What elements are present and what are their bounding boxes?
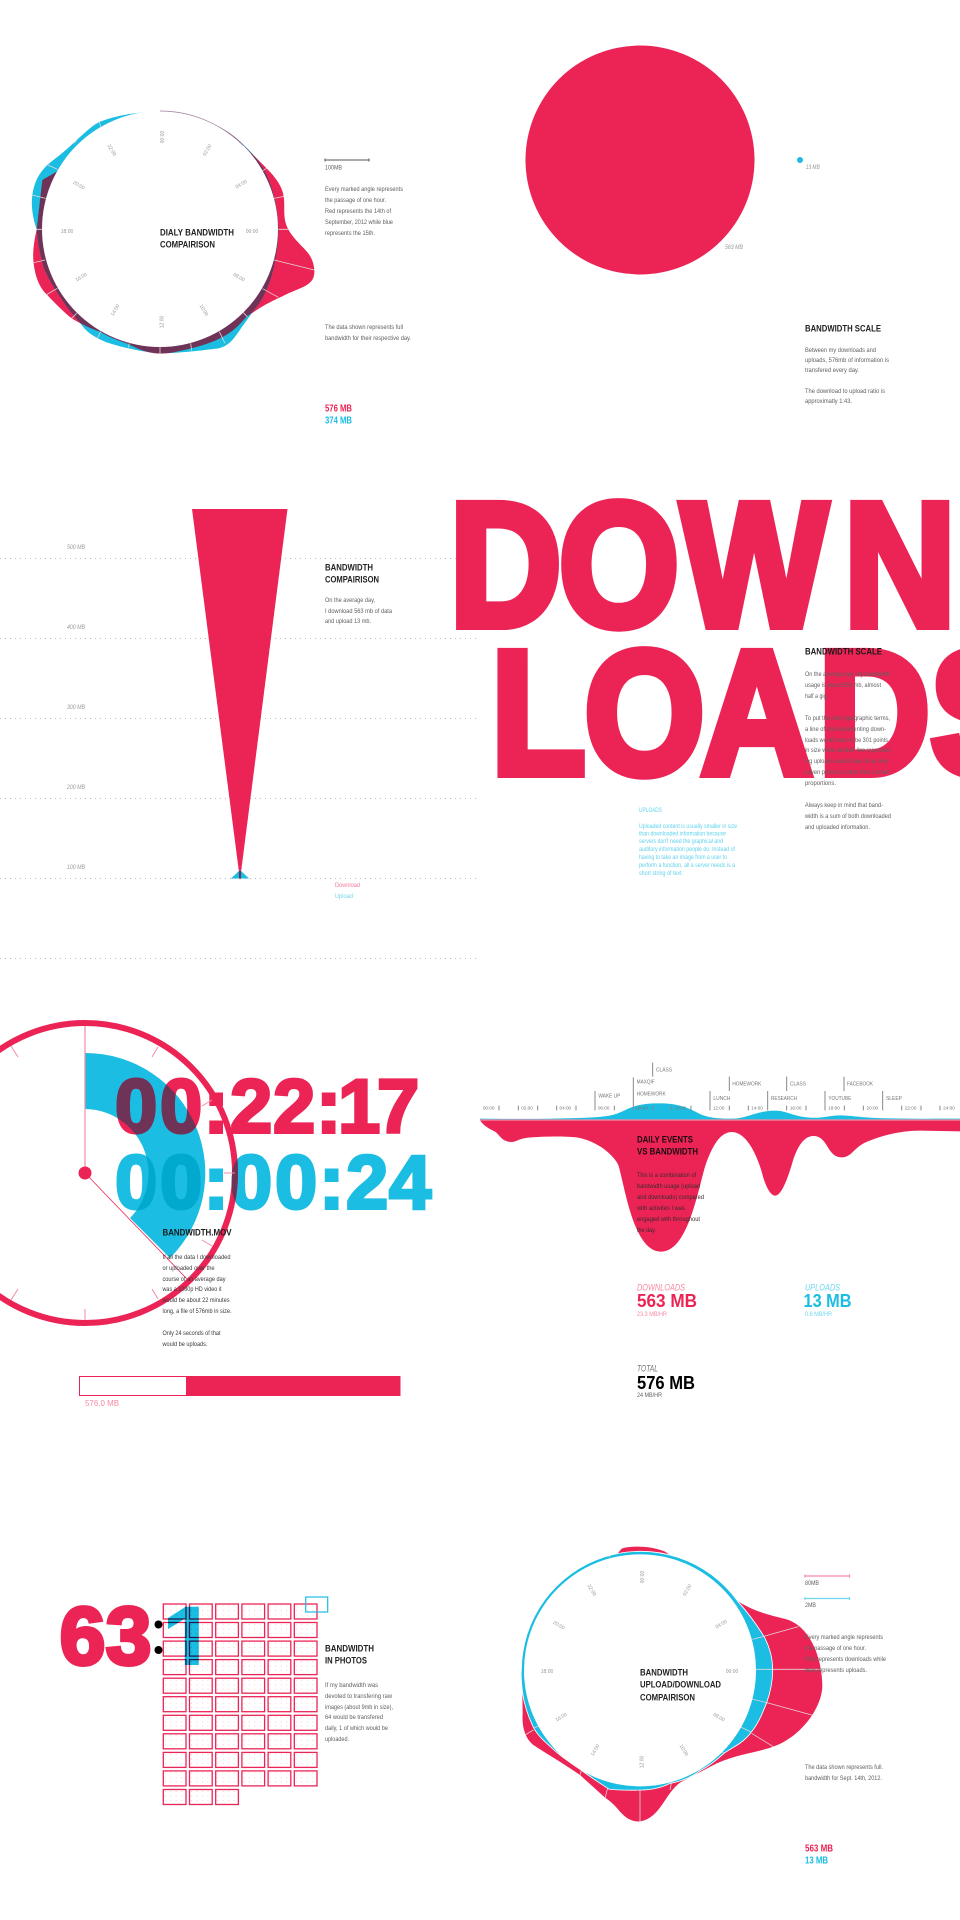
- events description: bandwidth usage (upload: [637, 1184, 700, 1190]
- red blob: 14th of September: [33, 111, 314, 354]
- panel: bandwidth comparison triangles: [0, 509, 480, 958]
- download area: [480, 1120, 960, 1252]
- heading: daily events vs bandwidth: DAILY EVENTS: [637, 1134, 693, 1146]
- events description: the day.: [637, 1228, 656, 1234]
- scale description: [805, 348, 889, 405]
- stat: uploads: [804, 1282, 852, 1318]
- event labels: YOUTUBE: [828, 1096, 852, 1102]
- photos description: If my bandwidth was: [325, 1683, 378, 1689]
- typographic scale description: and uploaded information.: [805, 825, 870, 831]
- hour labels: 22:00: [905, 1106, 917, 1111]
- heading: daily bandwidth comparison: DIALY BANDWIDTH: [160, 228, 234, 238]
- uploads note: UPLOADS: [639, 808, 662, 814]
- scale description: The download to upload ratio is: [805, 389, 885, 395]
- stat: uploads: 13 MB: [804, 1291, 852, 1311]
- cyan upload wedge: [85, 1053, 205, 1258]
- movie description: If all the data I downloaded: [162, 1255, 230, 1261]
- hour labels: 08:00: [232, 272, 246, 283]
- clock minute hand: [85, 1173, 187, 1279]
- hour labels: 06:00: [246, 229, 258, 235]
- data note: [805, 1765, 883, 1782]
- overlap of both blobs: [32, 111, 278, 353]
- hour labels: 12:00: [713, 1106, 725, 1111]
- events description: and downloads) compared: [637, 1195, 704, 1201]
- event labels: SLEEP: [886, 1096, 902, 1102]
- ratio number 63: 63: [60, 1591, 151, 1682]
- description text: Every marked angle represents: [805, 1635, 883, 1641]
- uploads note: Uploaded content is usually smaller in size: [639, 824, 738, 830]
- stat: downloads: [637, 1282, 697, 1318]
- event labels: WAKE UP: [598, 1094, 621, 1100]
- circle value labels: 563 MB: [725, 245, 743, 251]
- event labels: LUNCH: [713, 1096, 730, 1102]
- totals: 563 MB: [805, 1844, 833, 1854]
- description text: [325, 187, 403, 237]
- data note: The data shown represents full: [325, 325, 403, 331]
- gridlines and labels: 500 MB: [67, 545, 85, 551]
- heading: upload/download comparison: [640, 1668, 721, 1704]
- scale legend 100MB: [325, 158, 369, 172]
- scale description: transfered every day.: [805, 368, 859, 374]
- clock ticks: [11, 1046, 235, 1320]
- thin top-right edge arc: [160, 111, 243, 146]
- hour labels: 10:00: [675, 1106, 687, 1111]
- white clock face: [524, 1554, 756, 1786]
- stat: total: [637, 1364, 695, 1399]
- upload triangle: [231, 870, 249, 878]
- totals: [805, 1844, 833, 1866]
- description text: [805, 1635, 887, 1674]
- single uploaded photo: [306, 1597, 328, 1612]
- data note: bandwidth for Sept. 14th, 2012.: [805, 1776, 882, 1782]
- red blob hour lines: [525, 1627, 822, 1822]
- event labels: RESEARCH: [771, 1096, 797, 1102]
- hour labels: 04:00: [560, 1106, 572, 1111]
- upload area: [480, 1103, 960, 1120]
- event labels: HOMEWORK: [732, 1082, 762, 1088]
- typographic scale description: loads would have to be 301 points: [805, 738, 888, 744]
- description text: Red represents the 14th of: [325, 209, 391, 215]
- uploads note: perform a function, all a server needs is a: [639, 863, 736, 869]
- movie description: was a 1080p HD video it: [162, 1287, 222, 1293]
- stat: uploads: UPLOADS: [805, 1282, 841, 1294]
- events description: engaged with throughout: [637, 1217, 700, 1223]
- radial chart: [521, 1547, 822, 1822]
- hour labels: 06:00: [598, 1106, 610, 1111]
- movie description: would be about 22 minutes: [162, 1298, 230, 1304]
- ratio number 1: 1: [161, 1585, 218, 1699]
- typographic scale description: To put this into typographic terms,: [805, 716, 890, 722]
- panel: bandwidth scale circles: [526, 46, 889, 405]
- uploads note: servers don't need the graphical and: [639, 839, 723, 845]
- description text: blue represents uploads.: [805, 1668, 867, 1674]
- movie description: or uploaded over the: [162, 1266, 215, 1272]
- hour labels: 08:00: [712, 1712, 726, 1723]
- movie description: long, a file of 576mb in size.: [162, 1309, 232, 1315]
- heading: upload/download comparison: UPLOAD/DOWNLOAD: [640, 1680, 721, 1690]
- heading: bandwidth scale overlay: BANDWIDTH SCALE: [805, 646, 882, 658]
- gridlines and labels: 200 MB: [66, 785, 85, 791]
- heading: daily events vs bandwidth: [637, 1134, 698, 1158]
- data note: bandwidth for their respective day.: [325, 336, 411, 342]
- uploads note: than downloaded information because: [639, 832, 727, 838]
- hour labels: 22:00: [106, 143, 117, 157]
- hour labels: 18:00: [828, 1106, 840, 1111]
- cyan blob hour lines: [533, 1555, 773, 1775]
- description text: represents the 15th.: [325, 231, 375, 237]
- hour labels: 04:00: [714, 1619, 728, 1630]
- description text: September, 2012 while blue: [325, 220, 394, 226]
- typographic scale description: usage is about 563 mb, almost: [805, 683, 881, 689]
- hour lines: [32, 122, 314, 353]
- hour labels: [541, 1571, 738, 1768]
- movie description: [162, 1255, 232, 1348]
- panel: bandwidth.mov clock: [0, 1023, 431, 1408]
- event labels: FACEBOOK: [847, 1082, 873, 1088]
- upload timecode: 00:00:24: [115, 1140, 431, 1226]
- typographic scale description: ing uploads would have to be only: [805, 759, 888, 765]
- totals: [325, 404, 352, 426]
- hour labels: 18:00: [61, 229, 73, 235]
- heading: bandwidth comparison: [325, 562, 379, 586]
- hour labels: 00:00: [158, 131, 164, 143]
- download circle: [526, 46, 754, 274]
- upload timecode over wedge: 00:00:24: [115, 1140, 431, 1226]
- hour labels: 02:00: [682, 1583, 693, 1597]
- heading: daily bandwidth comparison: COMPAIRISON: [160, 240, 215, 250]
- stat: downloads: 563 MB: [637, 1291, 697, 1311]
- download timecode: 00:22:17: [115, 1064, 419, 1150]
- hour labels: [483, 1106, 955, 1111]
- clock ring: [0, 1023, 235, 1323]
- stat: uploads: 0.6 MB/HR: [805, 1312, 833, 1318]
- scale description: Between my downloads and: [805, 348, 876, 354]
- gridlines and labels: 400 MB: [67, 625, 85, 631]
- typographic scale description: width is a sum of both downloaded: [804, 814, 891, 820]
- event labels: CLASS: [790, 1082, 806, 1088]
- hour labels: 14:00: [110, 303, 121, 317]
- hour labels: 12:00: [639, 1756, 645, 1768]
- hour labels: 02:00: [202, 143, 213, 157]
- totals: 374 MB: [325, 416, 352, 426]
- scale legends: 2MB: [805, 1603, 816, 1609]
- event labels: MAXQIF: [637, 1080, 655, 1086]
- stat: total: 24 MB/HR: [637, 1393, 663, 1399]
- totals: 13 MB: [805, 1856, 828, 1866]
- hour labels: 06:00: [726, 1669, 738, 1675]
- word DOWN: DOWN: [450, 467, 956, 664]
- axis band: [480, 1119, 960, 1121]
- uploads note: having to take an image from a user to: [639, 855, 728, 861]
- scale description: approximatly 1:43.: [805, 399, 852, 405]
- hour labels: 00:00: [483, 1106, 495, 1111]
- triangle legend: Upload: [335, 894, 353, 900]
- hour labels: 12:00: [159, 316, 165, 328]
- typographic scale description: seven points to show their correct: [805, 770, 890, 776]
- typographic scale description: half a gig.: [805, 694, 828, 700]
- photos description: devoted to transfering raw: [325, 1694, 393, 1700]
- heading: upload/download comparison: BANDWIDTH: [640, 1668, 688, 1678]
- heading: bandwidth in photos: IN PHOTOS: [325, 1656, 367, 1666]
- panel: daily bandwidth comparison: [32, 111, 411, 426]
- comparison description: I download 563 mb of data: [325, 609, 393, 615]
- totals: 576 MB: [325, 404, 352, 414]
- description text: the passage of one hour.: [805, 1646, 866, 1652]
- movie description: would be uploads.: [162, 1342, 208, 1348]
- triangle legend: Download: [335, 883, 360, 889]
- hour labels: 22:00: [586, 1583, 597, 1597]
- hour labels: 02:00: [521, 1106, 533, 1111]
- upload dot: [797, 157, 803, 163]
- cyan upload blob: [521, 1551, 773, 1790]
- progress bar label: 576.0 MB: [85, 1398, 119, 1408]
- stat: total: 576 MB: [637, 1373, 695, 1393]
- hour labels: 16:00: [790, 1106, 802, 1111]
- hour labels: 20:00: [552, 1620, 566, 1631]
- ratio colon: [154, 1620, 162, 1654]
- comparison description: and upload 13 mb.: [325, 619, 371, 625]
- triangle overlap: [239, 871, 241, 878]
- hour labels: 14:00: [751, 1106, 763, 1111]
- heading: bandwidth.mov: BANDWIDTH.MOV: [162, 1228, 232, 1238]
- typographic scale description: in size while another line represent-: [805, 748, 892, 754]
- download triangle: [192, 509, 288, 880]
- heading: daily events vs bandwidth: VS BANDWIDTH: [637, 1146, 698, 1158]
- hour labels: 10:00: [678, 1743, 689, 1757]
- gridlines and labels: 300 MB: [67, 705, 85, 711]
- download timecode over wedge: 00:22:17: [115, 1064, 419, 1150]
- stat: downloads: 23.3 MB/HR: [637, 1312, 668, 1318]
- heading: bandwidth in photos: BANDWIDTH: [325, 1644, 374, 1654]
- event labels: HOMEWORK: [637, 1092, 666, 1098]
- upload timecode over ring: 00:00:24: [115, 1140, 431, 1226]
- typographic scale description: a line of text representing down-: [805, 727, 886, 733]
- hour labels: 00:00: [638, 1571, 644, 1583]
- hour labels: 14:00: [590, 1743, 601, 1757]
- scale legends: 80MB: [805, 1581, 819, 1587]
- scale description: uploads, 576mb of information is: [805, 358, 889, 364]
- typographic scale description: On the average day, my bandwidth: [805, 672, 890, 678]
- hour labels: 10:00: [198, 303, 209, 317]
- big title: downloads: [450, 467, 960, 812]
- uploads note: [639, 808, 738, 877]
- hour labels: [61, 131, 258, 328]
- hour labels: 20:00: [72, 180, 86, 191]
- movie description: Only 24 seconds of that: [162, 1331, 221, 1337]
- hour labels: 08:00: [636, 1106, 648, 1111]
- heading: bandwidth comparison: COMPAIRISON: [325, 574, 379, 586]
- event labels: CLASS: [656, 1067, 672, 1073]
- events description: [636, 1173, 704, 1234]
- movie description: course of an average day: [162, 1277, 226, 1283]
- panel: bandwidth in photos: [60, 1585, 393, 1804]
- typographic scale description: proportions.: [805, 781, 836, 787]
- triangle legend: [335, 883, 360, 900]
- uploads note: auditory information people do. Instead of: [639, 847, 735, 853]
- typographic scale description: [804, 672, 892, 831]
- red download blob: [522, 1547, 822, 1821]
- photos description: 64 would be transfered: [325, 1715, 383, 1721]
- hour labels: 04:00: [234, 179, 248, 190]
- hour labels: 18:00: [541, 1669, 553, 1675]
- heading: daily bandwidth comparison: [160, 228, 234, 250]
- hour labels: 16:00: [554, 1712, 568, 1723]
- gridlines and labels: [0, 545, 480, 958]
- stat: total: TOTAL: [637, 1364, 658, 1374]
- description text: Every marked angle represents: [325, 187, 403, 193]
- data note: [325, 325, 411, 342]
- data note: The data shown represents full.: [805, 1765, 883, 1771]
- hour labels: 24:00: [943, 1106, 955, 1111]
- photos description: daily, 1 of which would be: [325, 1726, 389, 1732]
- comparison description: [325, 598, 393, 625]
- photos description: [325, 1683, 393, 1743]
- comparison description: On the average day,: [325, 598, 375, 604]
- events description: This is a combination of: [637, 1173, 696, 1179]
- description text: the passage of one hour.: [325, 198, 386, 204]
- inner white clock face: [42, 111, 278, 347]
- stat: downloads: DOWNLOADS: [637, 1282, 686, 1294]
- scale legend 100MB: 100MB: [325, 166, 342, 172]
- circle value labels: 13 MB: [806, 165, 820, 171]
- clock centre: [78, 1166, 92, 1180]
- circle value labels: [725, 165, 820, 251]
- photos description: images (about 9mb in size),: [325, 1705, 393, 1711]
- events description: with activites I was: [636, 1206, 685, 1212]
- progress bar: [80, 1376, 400, 1396]
- panel: upload/download comparison: [521, 1547, 887, 1866]
- heading: bandwidth in photos: [325, 1644, 374, 1666]
- event labels: [598, 1067, 902, 1102]
- hour labels: 20:00: [867, 1106, 879, 1111]
- hour labels: 16:00: [74, 272, 88, 283]
- description text: Red represents downloads while: [805, 1657, 887, 1663]
- photo grid: [163, 1604, 317, 1804]
- blue blob: 15th of September: [32, 111, 278, 353]
- chart: radial day comparison blobs: [32, 111, 314, 354]
- clock hand: twelve o'clock: [84, 1026, 86, 1173]
- heading: bandwidth scale: BANDWIDTH SCALE: [805, 324, 881, 334]
- heading: upload/download comparison: COMPAIRISON: [640, 1692, 695, 1704]
- gridlines and labels: 100 MB: [67, 865, 85, 871]
- uploads note: short string of text.: [639, 871, 683, 877]
- panel: daily events vs bandwidth: [480, 1063, 960, 1399]
- photos description: uploaded.: [325, 1737, 349, 1743]
- heading: bandwidth comparison: BANDWIDTH: [325, 562, 373, 574]
- area chart: [480, 1063, 960, 1252]
- scale legends: [805, 1574, 850, 1609]
- typographic scale description: Always keep in mind that band-: [805, 803, 883, 809]
- axis ticks and event markers: [499, 1063, 940, 1110]
